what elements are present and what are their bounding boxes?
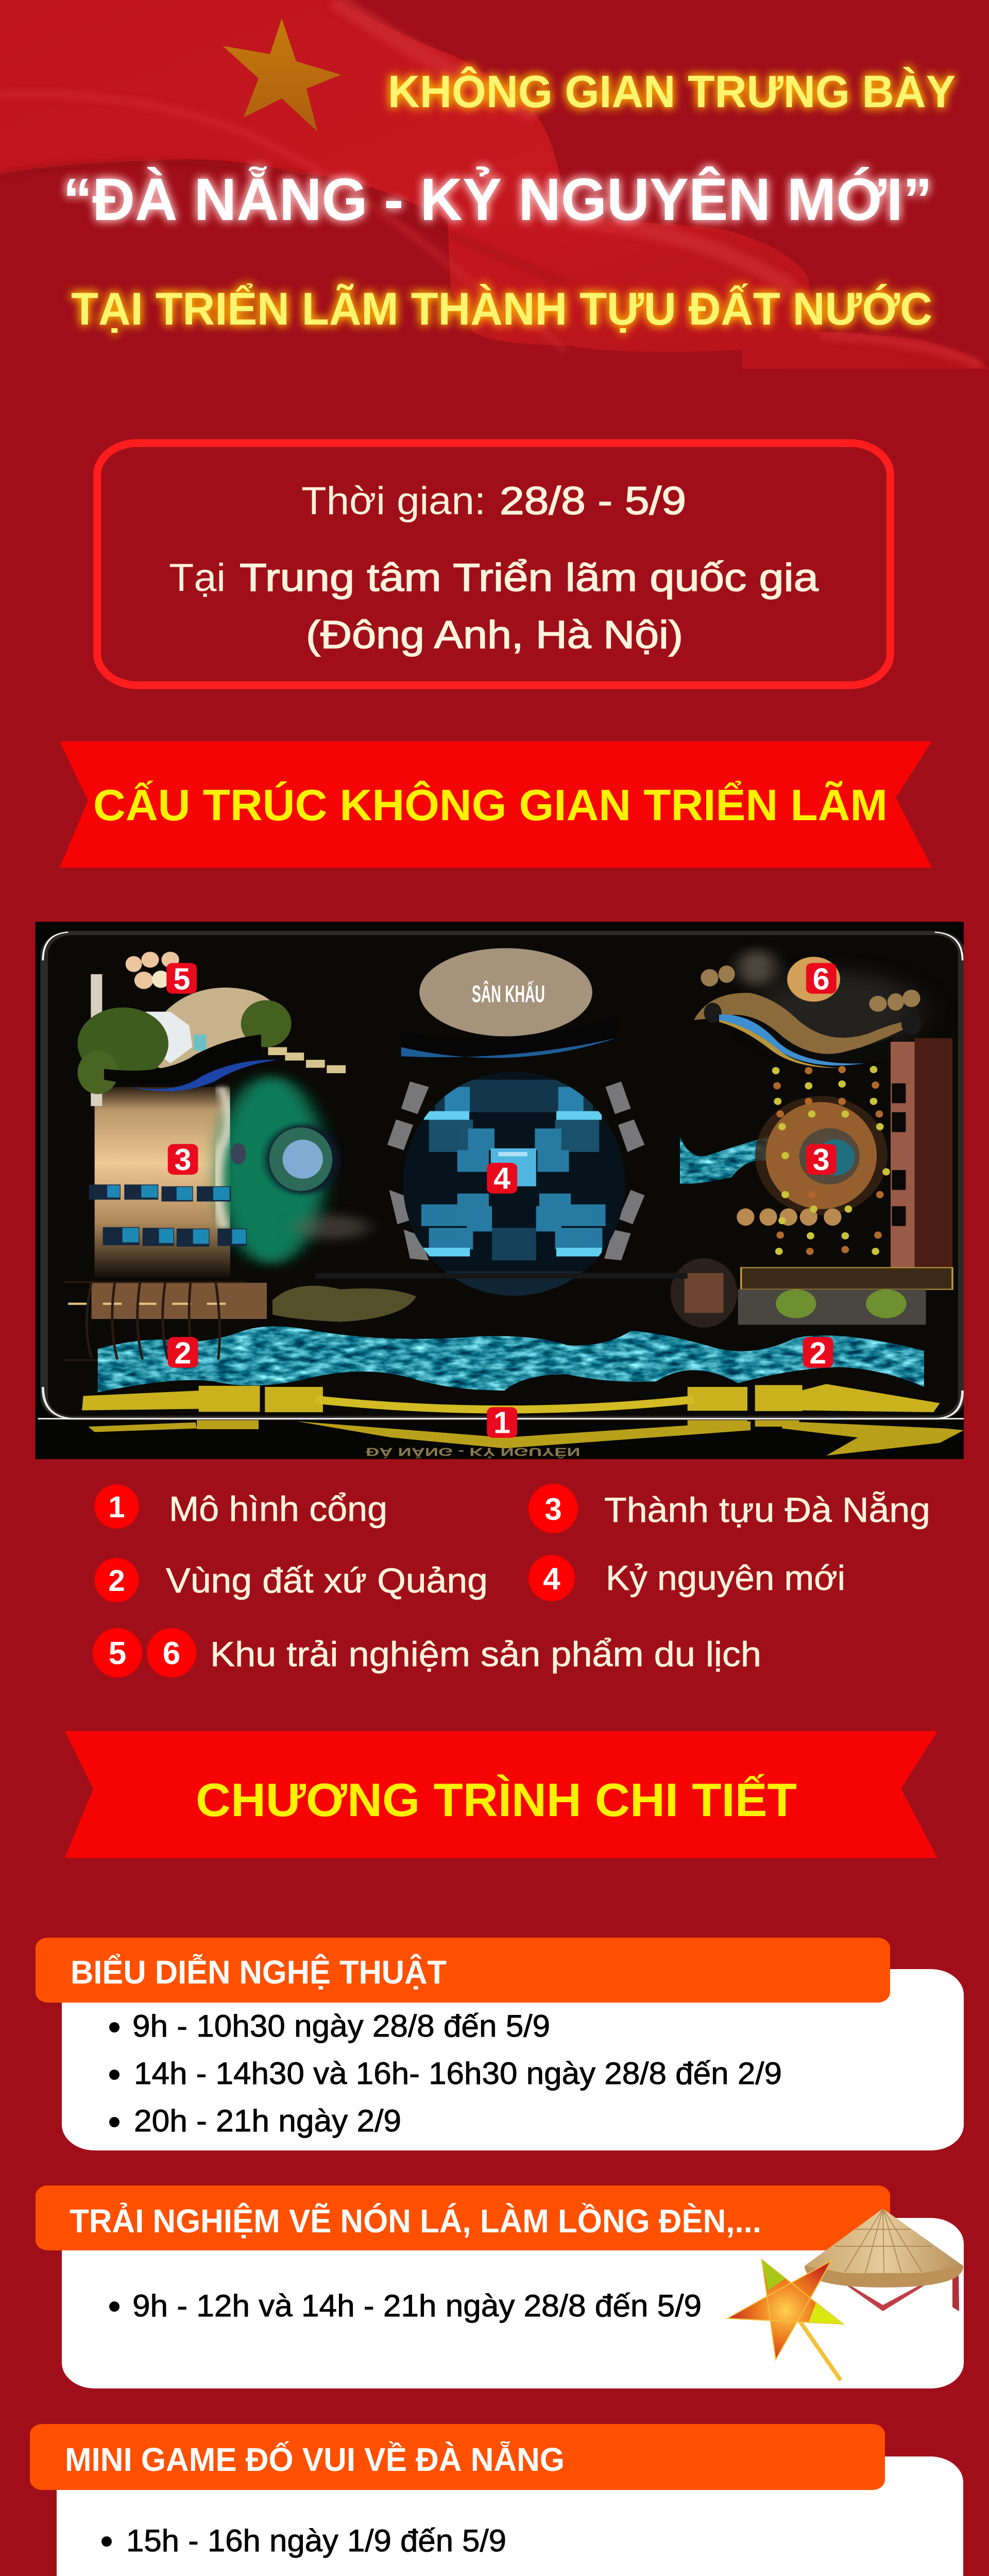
flag ribbon decoration bbox=[0, 0, 989, 369]
legend item 2 bbox=[95, 1558, 488, 1602]
title line 2: “ĐÀ NẴNG - KỶ NGUYÊN MỚI” bbox=[63, 165, 932, 233]
zone 1: gate model bbox=[38, 1384, 965, 1459]
title line 1: KHÔNG GIAN TRƯNG BÀY bbox=[388, 66, 956, 117]
card: mini game bbox=[30, 2424, 963, 2576]
legend item 5 and 6: Khu trải nghiệm sản phẩm du lịch bbox=[210, 1635, 761, 1674]
title bbox=[63, 66, 956, 334]
legend bbox=[93, 1484, 930, 1677]
card: art performances bbox=[36, 1938, 964, 2150]
card heading: MINI GAME ĐỐ VUI VỀ ĐÀ NẴNG bbox=[65, 2441, 565, 2478]
left zone: beach and sea bbox=[89, 1076, 369, 1279]
badge 3 right: 3 bbox=[813, 1143, 830, 1177]
badge 5: 5 bbox=[174, 962, 190, 996]
legend item 2: 2 bbox=[108, 1564, 125, 1598]
schedule list: 9h - 12h và 14h - 21h ngày 28/8 đến 5/9 bbox=[132, 2289, 702, 2323]
legend item 1: 1 bbox=[108, 1490, 125, 1524]
heading banner: exhibition structure bbox=[60, 741, 932, 868]
stage bbox=[397, 948, 621, 1058]
place name: Trung tâm Triển lãm quốc gia bbox=[240, 556, 819, 600]
icon: conical hat bbox=[805, 2209, 963, 2311]
map number badges bbox=[166, 962, 837, 1440]
legend item 5 and 6: 6 bbox=[163, 1636, 180, 1671]
legend item 3: Thành tựu Đà Nẵng bbox=[604, 1490, 930, 1530]
legend item 4: Kỷ nguyên mới bbox=[606, 1558, 845, 1598]
place prefix: Tại bbox=[169, 556, 226, 600]
stage: SÂN KHẤU bbox=[472, 980, 545, 1007]
icon: flag star bbox=[223, 19, 341, 131]
legend item 5 and 6: 5 bbox=[109, 1636, 126, 1671]
floor plan image bbox=[36, 922, 965, 1459]
zone 1: gate model: ĐÀ NẴNG - KỶ NGUYÊN bbox=[366, 1446, 581, 1459]
badge 3 left: 3 bbox=[175, 1143, 191, 1177]
zone 4: central digital oval bbox=[387, 1069, 644, 1300]
time value: 28/8 - 5/9 bbox=[500, 479, 686, 523]
schedule list: 14h - 14h30 và 16h- 16h30 ngày 28/8 đến 2/9 bbox=[134, 2056, 782, 2091]
zone 5: sand garden bbox=[78, 952, 346, 1106]
legend item 3 bbox=[528, 1484, 930, 1533]
card: hat painting and lantern making bbox=[36, 2185, 964, 2388]
schedule list bbox=[109, 2009, 782, 2138]
heading banner: detailed programme bbox=[65, 1731, 937, 1858]
legend item 4: 4 bbox=[543, 1562, 560, 1596]
legend item 2: Vùng đất xứ Quảng bbox=[166, 1561, 488, 1600]
badge 2 left: 2 bbox=[175, 1336, 191, 1370]
right zone: exhibition spiral bbox=[671, 950, 952, 1328]
legend item 4 bbox=[528, 1555, 845, 1601]
icon: star lantern bbox=[727, 2260, 843, 2380]
schedule list: 15h - 16h ngày 1/9 đến 5/9 bbox=[126, 2523, 506, 2558]
badge 1: 1 bbox=[493, 1406, 510, 1440]
bottom zone: land of Quang bbox=[63, 1273, 924, 1392]
card heading: BIỂU DIỄN NGHỆ THUẬT bbox=[71, 1953, 447, 1991]
panel: time and place bbox=[97, 443, 890, 685]
schedule list: 9h - 10h30 ngày 28/8 đến 5/9 bbox=[132, 2009, 550, 2043]
legend item 3: 3 bbox=[544, 1492, 562, 1527]
legend item 5 and 6 bbox=[93, 1628, 761, 1677]
card heading: TRẢI NGHIỆM VẼ NÓN LÁ, LÀM LỒNG ĐÈN,... bbox=[70, 2202, 761, 2240]
heading banner: detailed programme: CHƯƠNG TRÌNH CHI TIẾT bbox=[196, 1774, 797, 1826]
heading banner: exhibition structure: CẤU TRÚC KHÔNG GIAN TRIỂN LÃM bbox=[93, 781, 888, 830]
badge 4: 4 bbox=[493, 1162, 510, 1196]
title line 3: TẠI TRIỂN LÃM THÀNH TỰU ĐẤT NƯỚC bbox=[71, 283, 932, 334]
schedule list: 20h - 21h ngày 2/9 bbox=[134, 2104, 401, 2138]
legend item 1: Mô hình cổng bbox=[169, 1489, 387, 1529]
time label: Thời gian: bbox=[301, 479, 486, 523]
badge 2 right: 2 bbox=[809, 1336, 826, 1370]
badge 6: 6 bbox=[813, 962, 830, 996]
legend item 1 bbox=[95, 1484, 387, 1529]
place detail: (Đông Anh, Hà Nội) bbox=[306, 613, 683, 657]
